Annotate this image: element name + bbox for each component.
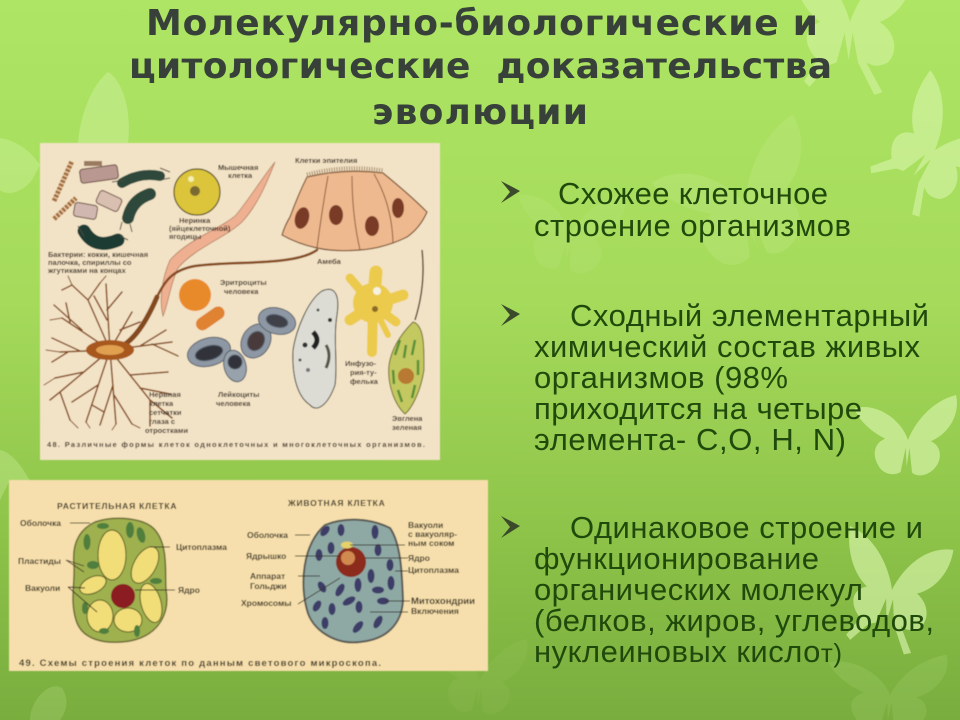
cell labels: Мышечная xyxy=(218,163,258,172)
bullet: identical organic molecules: (белков, жиров, углеводов, xyxy=(534,603,934,638)
plant and animal cell labels: Оболочка xyxy=(20,518,61,528)
bullet: similar chemical composition: организмов (98% xyxy=(534,360,788,395)
bullet: similar chemical composition xyxy=(501,298,929,457)
cell labels: фелька xyxy=(350,377,379,386)
icon: epithelial cells xyxy=(282,169,427,251)
plant and animal cell labels: Гольджи xyxy=(250,581,287,591)
plant and animal cell labels: Пластиды xyxy=(18,556,61,566)
icon: erythrocytes xyxy=(179,279,227,333)
cell labels: Эвглена xyxy=(392,414,423,423)
cell labels: клетка xyxy=(228,171,253,180)
cell labels: человека xyxy=(224,287,259,296)
icon: paramecium xyxy=(293,289,338,408)
bullet: identical organic molecules: нуклеиновых кислот) xyxy=(534,634,842,669)
icon: bacteria xyxy=(54,161,170,243)
cell labels: отростками xyxy=(145,426,188,435)
cell labels: зеленая xyxy=(392,423,422,432)
bullet: identical organic molecules: органических молекул xyxy=(534,572,863,607)
cell labels: рия-ту- xyxy=(350,368,377,377)
cell labels: Лейкоциты xyxy=(218,390,260,399)
cell labels: Амеба xyxy=(317,257,342,266)
icon: egg cell xyxy=(174,169,220,215)
plant and animal cell labels: Хромосомы xyxy=(241,598,292,608)
plant and animal cell labels: Цитоплазма xyxy=(408,565,459,575)
bullet: similar chemical composition: элемента- С,О, Н, N) xyxy=(534,422,846,457)
icon: animal cell xyxy=(303,520,403,642)
cell labels: Бактерии: кокки, кишечная xyxy=(48,250,148,259)
bullet: identical organic molecules: Одинаковое строение и xyxy=(570,510,923,545)
plant and animal cell labels: с вакуоляр- xyxy=(408,529,457,539)
title xyxy=(129,3,832,133)
icon: leukocytes xyxy=(184,304,299,384)
panel: forms of cells illustration xyxy=(40,143,440,460)
cell labels: Клетки эпителия xyxy=(295,156,357,165)
icon: amoeba xyxy=(350,272,403,352)
title: эволюции xyxy=(372,92,588,133)
icon: plant cell xyxy=(73,518,167,642)
cell labels: человека xyxy=(216,399,251,408)
bullet: similar cell structure: Схожее клеточное xyxy=(558,176,828,211)
cell labels: палочка, спириллы со xyxy=(48,258,132,267)
icon: neuron xyxy=(44,250,317,430)
plant and animal cell labels: Митохондрии xyxy=(411,596,475,607)
bullet: similar cell structure xyxy=(501,176,851,243)
bullet: identical organic molecules xyxy=(501,510,934,669)
plant and animal cell labels xyxy=(18,498,475,669)
plant and animal cell labels: Вакуоли xyxy=(25,583,60,593)
bullet: similar chemical composition: приходится на четыре xyxy=(534,391,862,426)
icon: arrow bullet xyxy=(501,304,520,326)
cell labels: клетка xyxy=(149,399,174,408)
plant and animal cell labels: Включения xyxy=(411,606,459,616)
title: цитологические доказательства xyxy=(129,46,832,87)
plant and animal cell labels: Цитоплазма xyxy=(176,542,227,552)
bullet: similar chemical composition: химический состав живых xyxy=(534,329,920,364)
plant and animal cell labels: 49. Схемы строения клеток по данным светового микроскопа. xyxy=(19,658,381,669)
title: Молекулярно-биологические и xyxy=(146,3,818,44)
plant and animal cell labels: ЖИВОТНАЯ КЛЕТКА xyxy=(287,498,386,508)
plant and animal cell labels: Вакуоли xyxy=(408,520,443,530)
bullet: similar cell structure: строение организмов xyxy=(534,208,851,243)
cell labels: Неринка xyxy=(179,216,211,225)
cell labels: Эритроциты xyxy=(220,278,267,287)
panel: plant and animal cell illustration xyxy=(9,480,488,671)
cell labels: Нервная xyxy=(149,390,181,399)
plant and animal cell labels: Ядро xyxy=(178,585,200,595)
plant and animal cell labels: Ядро xyxy=(408,553,430,563)
bullet: similar chemical composition: Сходный элементарный xyxy=(570,298,929,333)
cell labels: 48. Различные формы клеток одноклеточных и многоклеточных организмов. xyxy=(47,440,425,449)
plant and animal cell labels: Оболочка xyxy=(247,530,288,540)
bullet: identical organic molecules: функционирование xyxy=(534,541,819,576)
cell labels: (яйцеклеточной) xyxy=(169,224,231,233)
plant and animal cell labels: Аппарат xyxy=(250,571,285,581)
leader lines xyxy=(66,523,410,612)
cell labels: сетчатки xyxy=(149,408,182,417)
cell labels: ягодицы xyxy=(169,232,201,241)
plant and animal cell labels: РАСТИТЕЛЬНАЯ КЛЕТКА xyxy=(57,501,177,511)
icon: euglena xyxy=(389,250,424,414)
icon: arrow bullet xyxy=(501,181,520,203)
cell labels: Инфузо- xyxy=(345,359,377,368)
icon: muscle cell xyxy=(161,162,275,316)
plant and animal cell labels: Ядрышко xyxy=(246,551,286,561)
cell labels: глаза с xyxy=(149,417,175,426)
plant and animal cell labels: ным соком xyxy=(408,538,454,548)
cell labels: жгутиками на концах xyxy=(47,266,127,275)
cell labels xyxy=(47,156,425,449)
icon: arrow bullet xyxy=(501,516,520,538)
